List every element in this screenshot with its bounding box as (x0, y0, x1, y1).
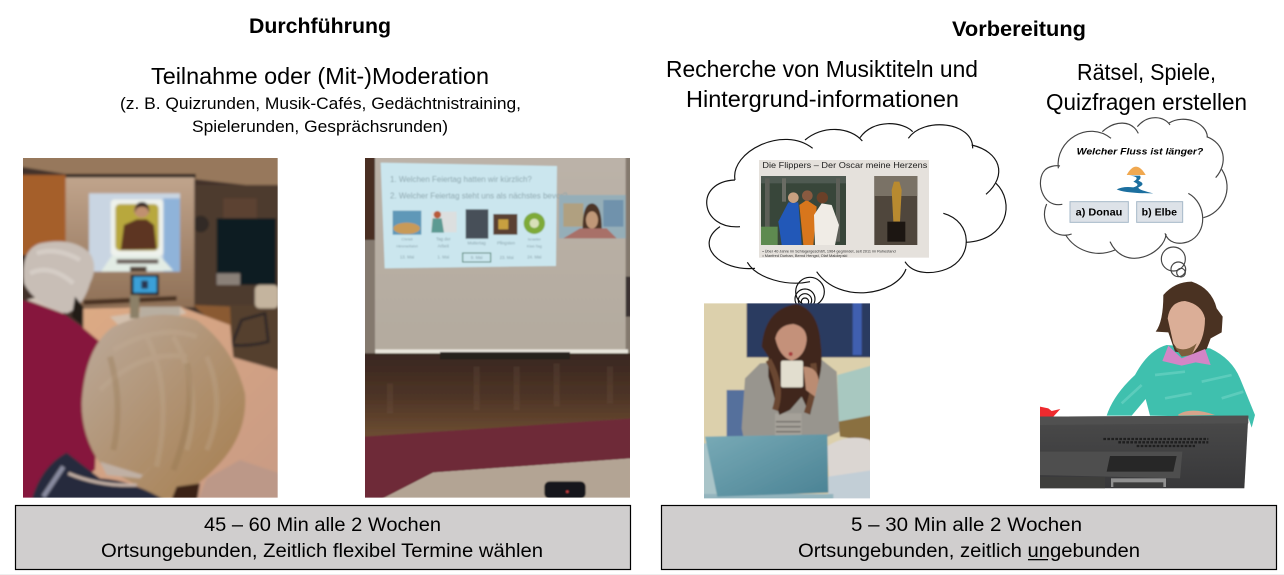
info box: Vorbereitung: 5 – 30 Min alle 2 Wochen (851, 515, 1082, 536)
photo: projected quiz slide: 13. Mai (400, 254, 414, 259)
button: b) Elbe (1137, 202, 1183, 222)
text block: Recherche: Recherche von Musiktiteln und (666, 56, 978, 82)
question text: Welcher Fluss ist länger? (1077, 146, 1204, 156)
slide: Die Flippers: Die Flippers – Der Oscar meine Herzens (762, 160, 928, 170)
heading: Durchführung: Durchführung (249, 15, 391, 38)
photo: projected quiz slide: Israeler (528, 237, 542, 242)
text block: Rätsel: Rätsel, Spiele, (1077, 59, 1216, 85)
photo: projected quiz slide: Himmelfahrt (396, 243, 419, 248)
photo: projected quiz slide: 24. Mai (527, 255, 541, 260)
photo: projected quiz slide (363, 157, 633, 500)
photo: woman with mug and laptop (700, 300, 873, 501)
slide: Die Flippers (759, 160, 929, 258)
info box: Vorbereitung (662, 506, 1276, 570)
thought cloud: music research (707, 124, 1006, 309)
text block: Recherche (666, 56, 978, 112)
info box: Durchführung: Ortsungebunden, Zeitlich flexibel Termine wählen (101, 541, 543, 562)
photo: projected quiz slide: 1. Mai (437, 254, 449, 259)
photo: projected quiz slide: Christi (401, 237, 413, 242)
photo: man at monitor (1040, 282, 1255, 488)
text block: Recherche: Hintergrund-informationen (686, 86, 959, 112)
photo: projected quiz slide: Pfingsten (497, 240, 516, 245)
info box: Durchführung (16, 506, 630, 570)
slide: Die Flippers: • Über 40 Jahre im Schlagergeschäft, 1964 gegründet, seit 2011 im Ruhestand (762, 249, 896, 253)
text block: Teilnahme oder Moderation: Teilnahme oder (Mit-)Moderation (151, 63, 489, 89)
photo: projected quiz slide: 23. Mai (500, 255, 514, 260)
icon: river and sun (1117, 167, 1153, 193)
photo: projected quiz slide: 1. Welchen Feiertag hatten wir kürzlich? (390, 175, 532, 184)
photo: projected quiz slide: Kiwi-Tag (527, 243, 542, 248)
heading: Vorbereitung: Vorbereitung (952, 18, 1086, 41)
button: b) Elbe: b) Elbe (1142, 208, 1177, 219)
button: a) Donau (1070, 202, 1128, 222)
photo: projected quiz slide: 2. Welcher Feiertag steht uns als nächstes bevor? (390, 192, 568, 201)
text block: Rätsel (1046, 59, 1247, 115)
info box: Durchführung: 45 – 60 Min alle 2 Wochen (204, 515, 441, 536)
slide: Die Flippers: • Manfred Durban, Bernd Hengst, Olaf Malolepski (762, 254, 848, 258)
photo: projected quiz slide: Tag der (436, 237, 451, 242)
photo: seniors watching projected video (17, 153, 283, 503)
photo: projected quiz slide: 9. Mai (471, 255, 483, 260)
photo: projected quiz slide: Arbeit (438, 244, 450, 249)
text block: Teilnahme oder Moderation: Spielerunden, Gesprächsrunden) (192, 117, 448, 136)
info box: Vorbereitung: Ortsungebunden, zeitlich ungebunden (798, 541, 1140, 562)
photo: projected quiz slide: Muttertag (468, 241, 486, 246)
text block: Teilnahme oder Moderation: (z. B. Quizrunden, Musik-Cafés, Gedächtnistraining, (120, 94, 521, 113)
text block: Teilnahme oder Moderation (120, 63, 521, 136)
thought cloud: river quiz (1040, 118, 1227, 277)
button: a) Donau: a) Donau (1076, 208, 1122, 219)
text block: Rätsel: Quizfragen erstellen (1046, 89, 1247, 115)
